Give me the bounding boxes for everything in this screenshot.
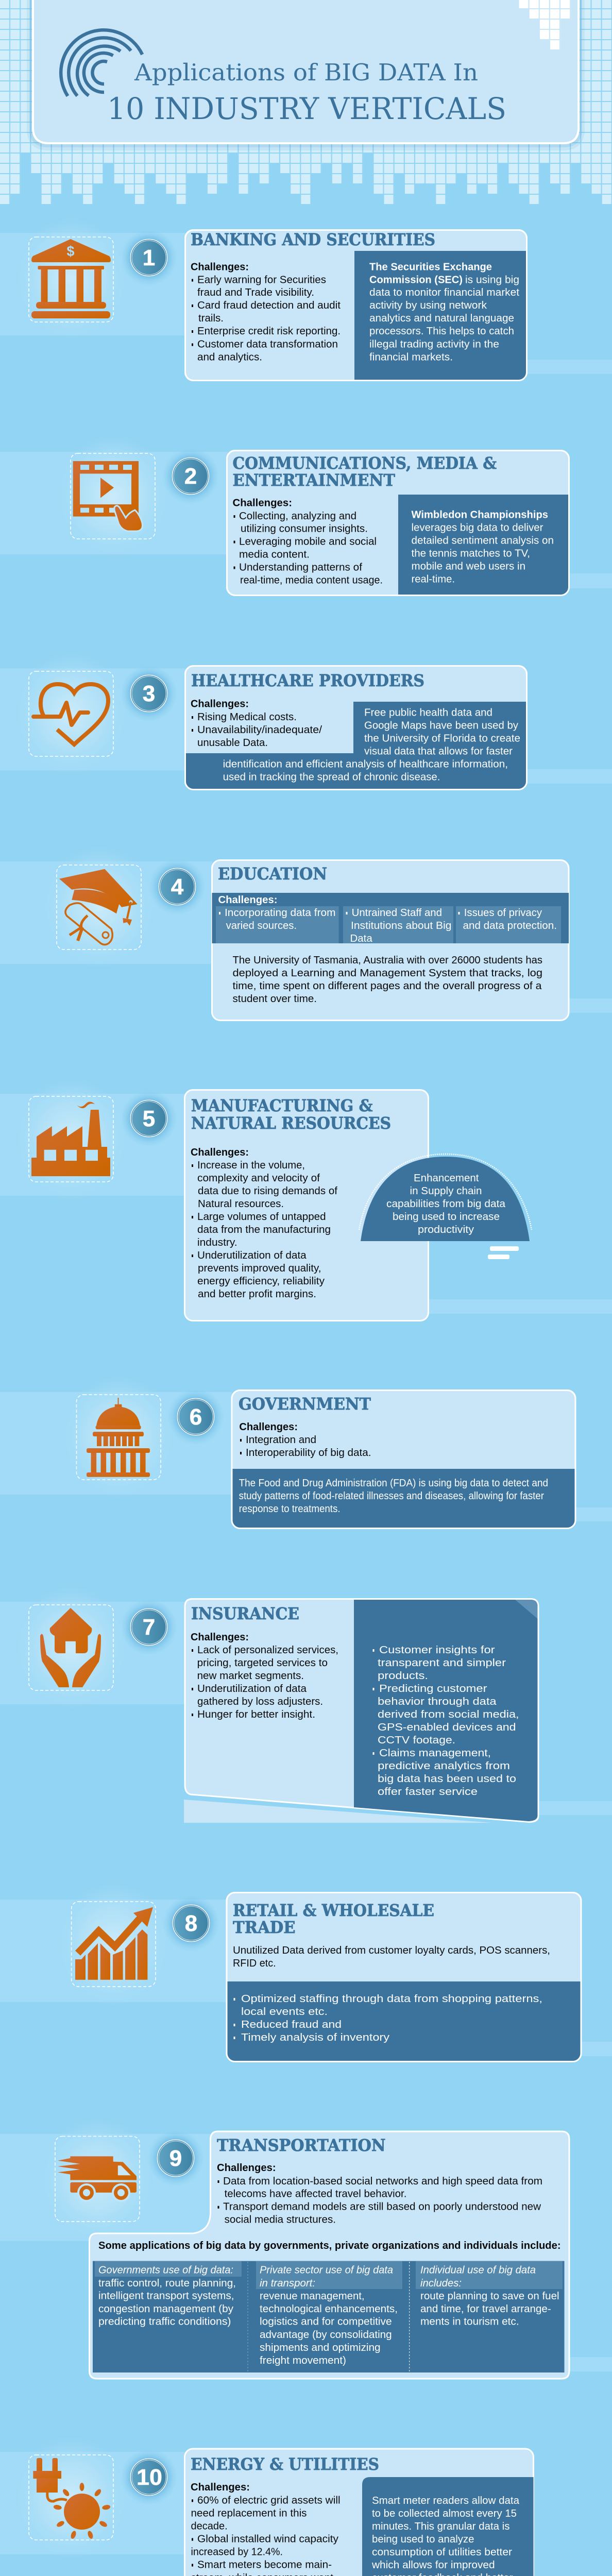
text: University of Tasmania example [233,955,542,1005]
heading: TRANSPORTATION [217,2136,385,2155]
title: Applications of BIG DATA In [134,59,478,86]
text: unutilized data: Unutilized Data derived from customer loyalty cards, POS scanners, [233,1945,550,1956]
callout: supply chain dome: capabilities from big data [386,1198,506,1210]
section 1: banking and securities [12,216,526,380]
badge: 4 [159,869,196,905]
challenges list: Data from location-based social networks and high speed data from [223,2176,542,2187]
challenges list: trails. [198,313,224,324]
text: insurance applications: products. [378,1670,428,1682]
challenges list: Challenges: [233,498,292,509]
heading [191,1096,391,1133]
text: smart meter example: consumption of utilities better [372,2547,512,2558]
text: SEC example: data to monitor financial market [369,287,519,298]
text: SEC example: Commission (SEC) [369,274,463,285]
text: smart meter example [371,2495,520,2576]
challenges list: Challenges: [191,1147,249,1158]
text: Wimbledon example: Wimbledon Championships [411,509,548,520]
challenges list: energy efficiency, reliability [197,1276,325,1287]
icon: video film and hand [71,453,155,539]
card: healthcare [185,666,526,789]
column: private sector: Private sector use of big data [260,2265,393,2276]
text: unutilized data: RFID etc. [233,1958,276,1969]
badge: 9: 9 [169,2146,182,2171]
challenges strip: Incorporating data from [225,907,336,919]
text: University of Tasmania example: The University of Tasmania, Australia with over 26000 students has [233,955,542,966]
challenges list [233,498,383,586]
text: insurance applications: behavior through data [378,1696,497,1707]
challenges list: Transport demand models are still based on poorly understood new [223,2201,541,2213]
column: private sector: advantage (by consolidating [260,2329,392,2341]
challenges list: telecoms have affected travel behavior. [225,2189,406,2200]
column: governments: predicting traffic conditions) [98,2316,231,2328]
text: University of Florida example: Google Maps have been used by [364,720,518,732]
challenges list: and analytics. [197,351,262,363]
section 3: healthcare providers [12,651,526,789]
challenges list: Card fraud detection and audit [197,300,341,311]
badge: 2 [172,457,209,495]
challenges list: Challenges: [191,699,249,710]
heading: ENTERTAINMENT [233,471,396,490]
column: governments: Governments use of big data: [98,2265,233,2276]
section 7: insurance [12,1585,538,1823]
icon: delivery truck [55,2136,140,2222]
challenges list: Challenges: [191,1632,249,1643]
text: smart meter example: minutes. This granular data is [372,2521,509,2532]
text: SEC example: financial markets. [369,351,453,363]
heading: HEALTHCARE PROVIDERS [191,671,424,690]
badge: 6: 6 [190,1404,202,1430]
challenges list: Global installed wind capacity [197,2534,338,2545]
title [107,59,506,126]
text: SEC example: activity by using network [369,300,487,311]
text: retail applications: Optimized staffing through data from shopping patterns, [241,1993,542,2005]
callout: supply chain dome [359,1154,532,1259]
text: insurance applications: derived from social media, [378,1709,519,1720]
challenges list: industry. [197,1237,237,1248]
challenges list: Early warning for Securities [197,274,326,285]
heading: RETAIL & WHOLESALE [233,1901,434,1920]
text: retail applications: local events etc. [241,2006,328,2018]
badge: 4: 4 [171,874,184,900]
icon: bank: $ [67,243,75,259]
text: Wimbledon example: leverages big data to deliver [411,522,543,534]
challenges list: real-time, media content usage. [240,575,383,586]
text: University of Tasmania example: student over time. [233,993,317,1005]
challenges list [239,1421,371,1459]
section 8: retail and wholesale trade [54,1882,581,2062]
challenges list: media content. [239,549,310,561]
section 9: transportation [38,2116,569,2379]
column: governments: traffic control, route planning, [98,2278,236,2289]
column: private sector [260,2265,398,2366]
challenges list: Natural resources. [198,1198,284,1210]
card: manufacturing [184,1090,429,1321]
heading: GOVERNMENT [239,1395,371,1414]
challenges list: Underutilization of data [197,1250,307,1261]
text: FDA example [239,1478,548,1515]
text: FDA example: study patterns of food-related illnesses and diseases, allowing for faster [239,1490,544,1502]
challenges list: Underutilization of data [197,1683,307,1694]
column: governments: congestion management (by [98,2303,233,2315]
text: University of Florida example: used in tracking the spread of chronic disease. [223,772,440,783]
challenges list [191,1147,337,1300]
challenges strip: varied sources. [226,920,297,931]
text: University of Florida example [223,707,520,783]
text: insurance applications: predictive analytics from [378,1760,510,1772]
badge: 5 [131,1100,167,1137]
section 5: manufacturing and natural resources [12,1076,532,1321]
challenges list: decade. [191,2520,228,2532]
section 6: government [59,1375,575,1528]
challenges list: unusable Data. [197,737,268,749]
badge: 3 [131,675,167,712]
text: SEC example: processors. This helps to catch [369,326,514,337]
text: Wimbledon example: real-time. [411,574,455,585]
challenges strip: Untrained Staff and [352,907,442,919]
callout: supply chain dome: in Supply chain [410,1185,482,1197]
text: insurance applications: CCTV footage. [378,1735,455,1746]
challenges list [191,1632,338,1720]
text: insurance applications: Predicting customer [379,1683,487,1694]
icon: plug and sun [29,2455,113,2540]
challenges list: Challenges: [217,2162,276,2174]
table: applications by sector [93,2261,565,2372]
text: Wimbledon example [411,509,554,585]
text: retail applications: Timely analysis of inventory [241,2032,389,2043]
challenges list: data due to rising demands of [198,1185,337,1197]
panel: header [32,0,580,144]
column: individuals: ments in tourism etc. [420,2316,519,2328]
heading: EDUCATION [218,865,327,884]
card: government [232,1390,575,1528]
callout: supply chain dome: Enhancement [414,1173,479,1184]
badge: 1 [131,239,167,276]
heading: NATURAL RESOURCES [191,1114,391,1133]
text: FDA example: The Food and Drug Administration (FDA) is using big data to detect and [239,1478,548,1489]
challenges list: gathered by loss adjusters. [197,1696,323,1707]
column: individuals: includes: [420,2278,462,2289]
title: 10 INDUSTRY VERTICALS [107,91,506,126]
icon: rising chart [72,1902,156,1987]
text: insurance applications [373,1645,519,1798]
challenges list [191,2482,341,2576]
challenges list: pricing, targeted services to [197,1657,328,1669]
text: University of Florida example: visual data that allows for faster [364,746,513,757]
column: private sector: freight movement) [260,2355,346,2366]
text: retail applications: Reduced fraud and [241,2019,342,2030]
challenges list: Large volumes of untapped [197,1211,326,1223]
challenges list [217,2162,542,2226]
challenges strip: Institutions about Big [351,920,451,931]
challenges list: Rising Medical costs. [197,711,297,723]
challenges list: Hunger for better insight. [197,1709,315,1720]
badge: 2: 2 [184,464,197,489]
heading [233,1901,434,1937]
section 10: energy and utilities [12,2435,534,2576]
text: Wimbledon example: the tennis matches to TV, [411,548,530,560]
challenges strip: Challenges: [218,894,277,906]
badge: 9 [158,2140,194,2176]
icon: capitol dome [76,1395,161,1480]
text: unutilized data [233,1945,550,1969]
badge: 1: 1 [143,245,155,270]
challenges list: need replacement in this [191,2508,307,2519]
challenges strip [212,893,569,944]
challenges list: Interoperability of big data. [246,1447,371,1459]
card: insurance [185,1599,538,1822]
section 2: communications, media and entertainment [54,433,569,596]
badge: 10: 10 [137,2465,162,2490]
challenges list: Unavailability/inadequate/ [197,724,322,736]
card: education [212,860,569,1020]
text: SEC example: analytics and natural language [369,313,514,324]
icon: bank [29,237,113,322]
text: SEC example: The Securities Exchange [369,262,492,273]
challenges list: increased by 12.4%. [191,2546,283,2557]
text: insurance applications: Claims management, [379,1748,491,1759]
text: smart meter example: which allows for improved [371,2560,495,2571]
column: individuals: and time, for travel arrange- [420,2303,551,2315]
challenges strip: Data [350,933,373,944]
text: University of Florida example: Free public health data and [364,707,492,719]
challenges list: Understanding patterns of [239,562,362,573]
challenges list: fraud and Trade visibility. [197,287,314,298]
callout: supply chain dome: productivity [418,1224,474,1235]
text: insurance applications: Customer insights for [379,1645,495,1656]
challenges list: Collecting, analyzing and [239,511,356,522]
card: energy [184,2449,534,2576]
column: governments [98,2265,236,2328]
column: individuals: Individual use of big data [420,2265,536,2276]
badge: 7: 7 [143,1615,155,1640]
challenges list: social media structures. [225,2214,336,2226]
text: University of Florida example: identification and efficient analysis of healthcare information, [223,759,508,770]
badge: 7 [131,1608,167,1646]
badge: 10 [131,2459,167,2496]
badge: 8 [173,1905,209,1941]
icon: house in hands [29,1605,113,1690]
challenges list [191,699,322,749]
heading: ENERGY & UTILITIES [191,2455,379,2474]
badge: 5: 5 [143,1106,155,1131]
text: SEC example: illegal trading activity in the [369,339,499,350]
challenges list: utilizing consumer insights. [241,523,368,535]
card: retail [227,1893,581,2062]
column: private sector: technological enhancements, [260,2303,398,2315]
text: insurance applications: offer faster service [378,1786,478,1798]
text: University of Florida example: the University of Florida to create [364,733,520,744]
challenges strip: Issues of privacy [464,907,542,919]
challenges list [191,262,341,363]
column: private sector: shipments and optimizing [260,2342,381,2353]
challenges list: Challenges: [191,262,249,273]
heading: MANUFACTURING & [191,1096,373,1115]
text: Wimbledon example: detailed sentiment analysis on [411,535,554,547]
column: private sector: in transport: [260,2278,315,2289]
challenges list: and better profit margins. [198,1289,316,1300]
section 4: education [40,844,569,1020]
subheading: applications: Some applications of big data by governments, private organizations and individuals include: [98,2240,561,2251]
challenges list: Smart meters become main- [197,2560,332,2571]
challenges list: prevents improved quality, [198,1263,321,1274]
challenges strip: and data protection. [463,920,557,931]
heading: BANKING AND SECURITIES [191,230,435,249]
heading: INSURANCE [191,1604,299,1623]
text: SEC example [369,262,519,363]
heading [233,454,497,490]
challenges list: Lack of personalized services, [197,1645,338,1656]
text: FDA example: response to treatments. [239,1503,341,1515]
text: smart meter example: Smart meter readers allow data [372,2495,520,2506]
icon: signal arcs logo [61,30,142,96]
heading: TRADE [233,1918,296,1937]
text: insurance applications: transparent and simpler [378,1657,506,1669]
challenges list: Integration and [246,1434,316,1446]
callout: supply chain dome: being used to increase [393,1211,500,1223]
heading: COMMUNICATIONS, MEDIA & [233,454,497,473]
text: smart meter example: to be collected almost every 15 [372,2508,517,2519]
icon: heart with pulse [29,671,113,756]
challenges list: Challenges: [239,1421,298,1433]
column: governments: intelligent transport systems, [98,2291,234,2302]
challenges list: complexity and velocity of [197,1173,320,1184]
badge: 6 [177,1398,214,1435]
card: banking [185,230,526,380]
text: retail applications [234,1993,542,2043]
challenges list: Leveraging mobile and social [239,536,377,547]
icon: graduation cap and diploma [57,865,141,950]
column: private sector: revenue management, [260,2291,365,2302]
text: University of Tasmania example: time, time spent on different pages and the overall progress of a [233,980,542,992]
challenges list: 60% of electric grid assets will [197,2495,341,2506]
challenges list: Challenges: [191,2482,250,2493]
text: smart meter example: being used to analyze [372,2534,474,2545]
challenges list: new market segments. [197,1670,304,1682]
card: transportation [90,2131,569,2379]
column: private sector: logistics and for competitive [260,2316,392,2328]
card: communications [227,450,569,596]
icon: factory [29,1096,113,1182]
badge: 3: 3 [143,681,155,706]
badge: 8: 8 [185,1911,197,1936]
text: Wimbledon example: mobile and web users in [411,561,525,572]
text: University of Tasmania example: deployed a Learning and Management System that tracks, log [233,968,542,979]
challenges list: data from the manufacturing [197,1224,331,1235]
column: individuals [420,2265,559,2328]
column: individuals: route planning to save on fuel [420,2291,559,2302]
challenges list: Customer data transformation [197,339,338,350]
challenges list: Enterprise credit risk reporting. [197,326,341,337]
text: SEC example: is using big [465,274,519,285]
text: insurance applications: big data has been used to [378,1773,516,1785]
text: insurance applications: GPS-enabled devices and [378,1722,516,1733]
challenges list: Increase in the volume, [197,1160,305,1171]
